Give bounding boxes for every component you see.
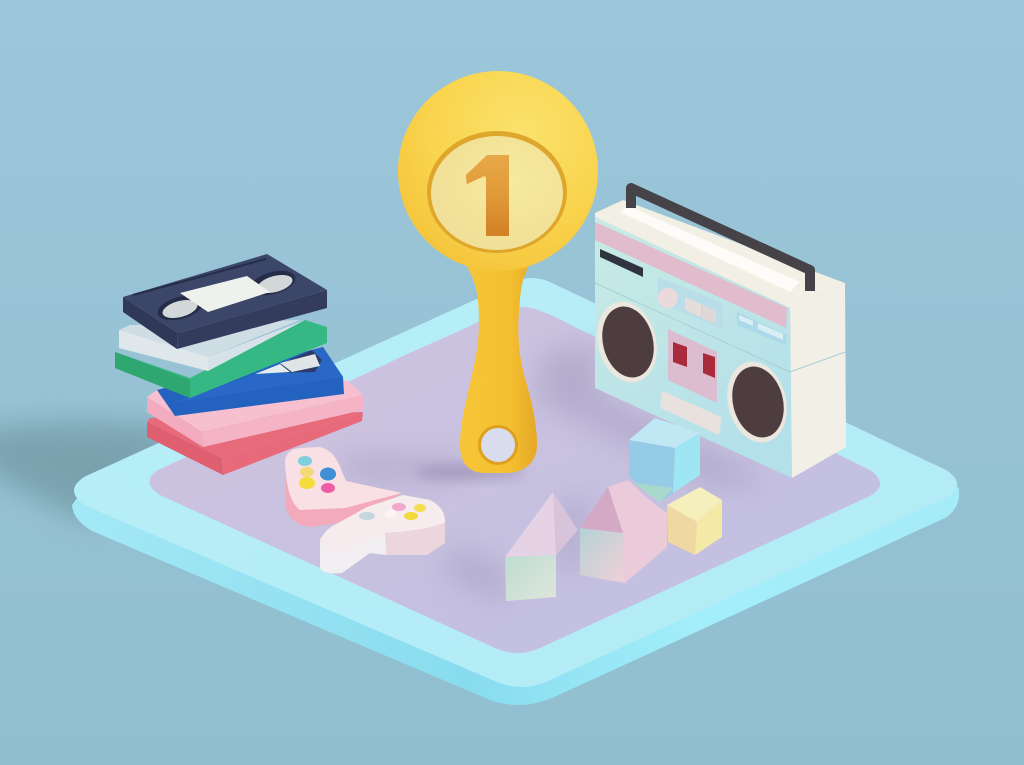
block: house (580, 480, 667, 583)
bar button (662, 393, 720, 433)
controller: white (320, 495, 445, 573)
tuner panel (737, 312, 787, 345)
platform shadow (0, 422, 190, 521)
tape: navy (123, 254, 327, 349)
top highlight (620, 206, 800, 292)
tape: pink (147, 380, 363, 447)
tape: blue (157, 347, 344, 416)
tape: red (147, 412, 363, 475)
boombox handle (631, 188, 810, 291)
speaker left (589, 295, 665, 389)
rattle shadow (415, 465, 525, 479)
boombox front (595, 217, 792, 478)
block: blue cube (629, 418, 700, 502)
speaker right (719, 355, 795, 449)
pink stripe (595, 222, 787, 328)
geometric blocks (505, 418, 722, 601)
purple mat (149, 307, 880, 653)
boombox top (595, 200, 845, 308)
cassette deck (668, 329, 717, 403)
controller: pink (285, 447, 402, 527)
platform (72, 278, 959, 705)
number 1: 1 (453, 129, 542, 261)
handle ring (480, 426, 516, 464)
boombox (589, 188, 846, 478)
dark slot (600, 249, 643, 277)
tape: green (115, 320, 327, 398)
control panel (658, 277, 723, 330)
tape: white (119, 320, 305, 371)
block: yellow cube (667, 487, 722, 555)
rattle handle (458, 250, 537, 473)
VHS tape stack (115, 254, 363, 475)
rattle head (398, 71, 598, 271)
illustration: retro toys on a platform (0, 71, 960, 705)
medallion (427, 129, 567, 261)
yellow rattle trophy (398, 71, 598, 473)
game controllers (285, 447, 445, 573)
boombox side (790, 283, 846, 478)
mat shadows (340, 345, 770, 605)
block: prism (505, 492, 578, 601)
